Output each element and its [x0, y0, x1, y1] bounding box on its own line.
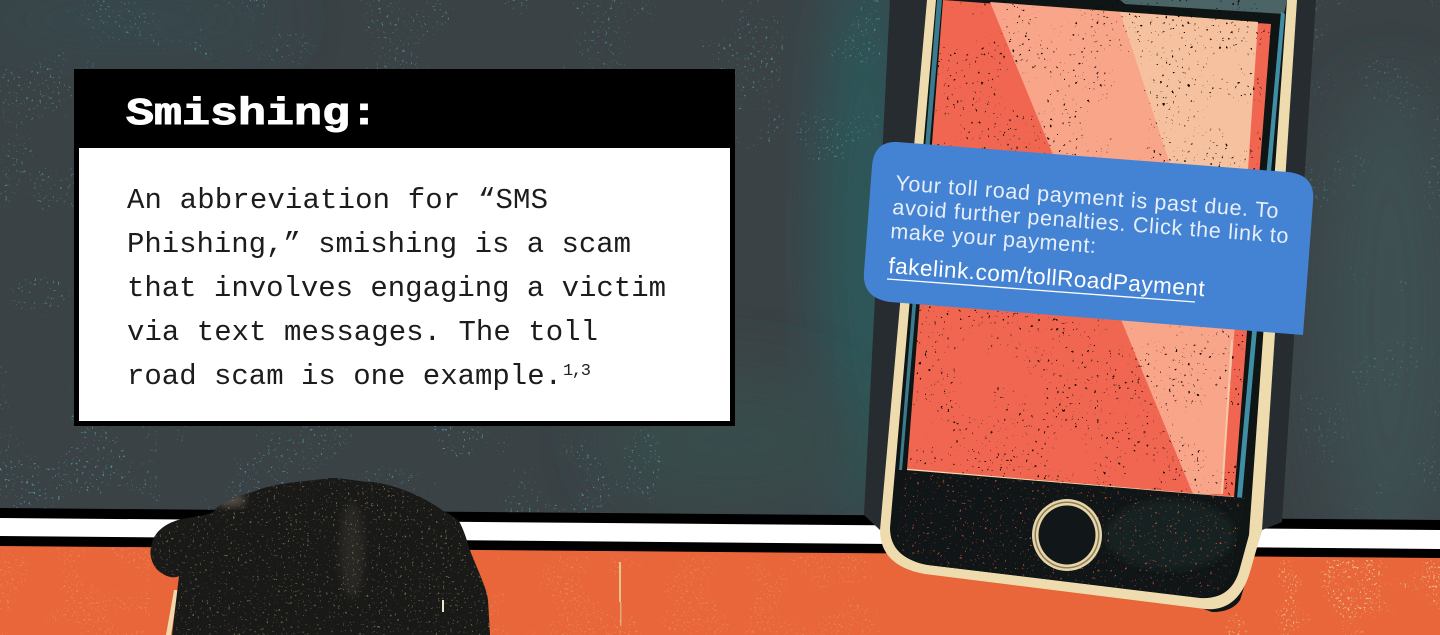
body text: road scam is one example.: [127, 360, 562, 393]
icon: home button: [1032, 499, 1102, 571]
heading: Smishing:: [126, 93, 378, 136]
definition card: [74, 69, 735, 426]
message bubble: toll road scam text: [864, 142, 1313, 335]
body text: Phishing,” smishing is a scam: [127, 228, 631, 261]
body text: that involves engaging a victim: [127, 272, 666, 305]
bubble text: message: [890, 171, 1289, 258]
screen: peach light beam: [990, 2, 1258, 494]
card body panel: [79, 148, 730, 421]
teal screen edge right: [1237, 12, 1285, 498]
person silhouette: head from behind: [150, 478, 490, 635]
phone chin with speckle: [890, 470, 1250, 605]
body text: An abbreviation for “SMS: [127, 184, 548, 217]
phone shadow: [864, 0, 1316, 612]
bubble text: message: avoid further penalties. Click the link to: [892, 195, 1289, 248]
screen: black speckle: [900, 0, 1280, 500]
orange ground texture: [0, 548, 1440, 635]
bubble text: message: Your toll road payment is past due. To: [895, 171, 1279, 223]
glass top band: [1120, 0, 1287, 14]
road stripes: black and white bands: [0, 508, 1440, 635]
phone face: black glass: [890, 0, 1287, 598]
screen: pale light beam: [1120, 12, 1258, 170]
card frame: [74, 69, 735, 426]
phone shadow: dark lower right: [1190, 500, 1262, 612]
bubble text: fake link: fakelink.com/tollRoadPayment: [888, 253, 1206, 301]
phone body: cream frame: [880, 0, 1297, 609]
screen: [900, 0, 1280, 500]
body text: [127, 184, 666, 393]
teal screen edge left: [899, 0, 942, 470]
body text: via text messages. The toll: [127, 316, 598, 349]
smartphone: [864, 0, 1316, 612]
body text: 1,3: [563, 362, 591, 381]
bubble text: message: make your payment:: [890, 219, 1097, 258]
